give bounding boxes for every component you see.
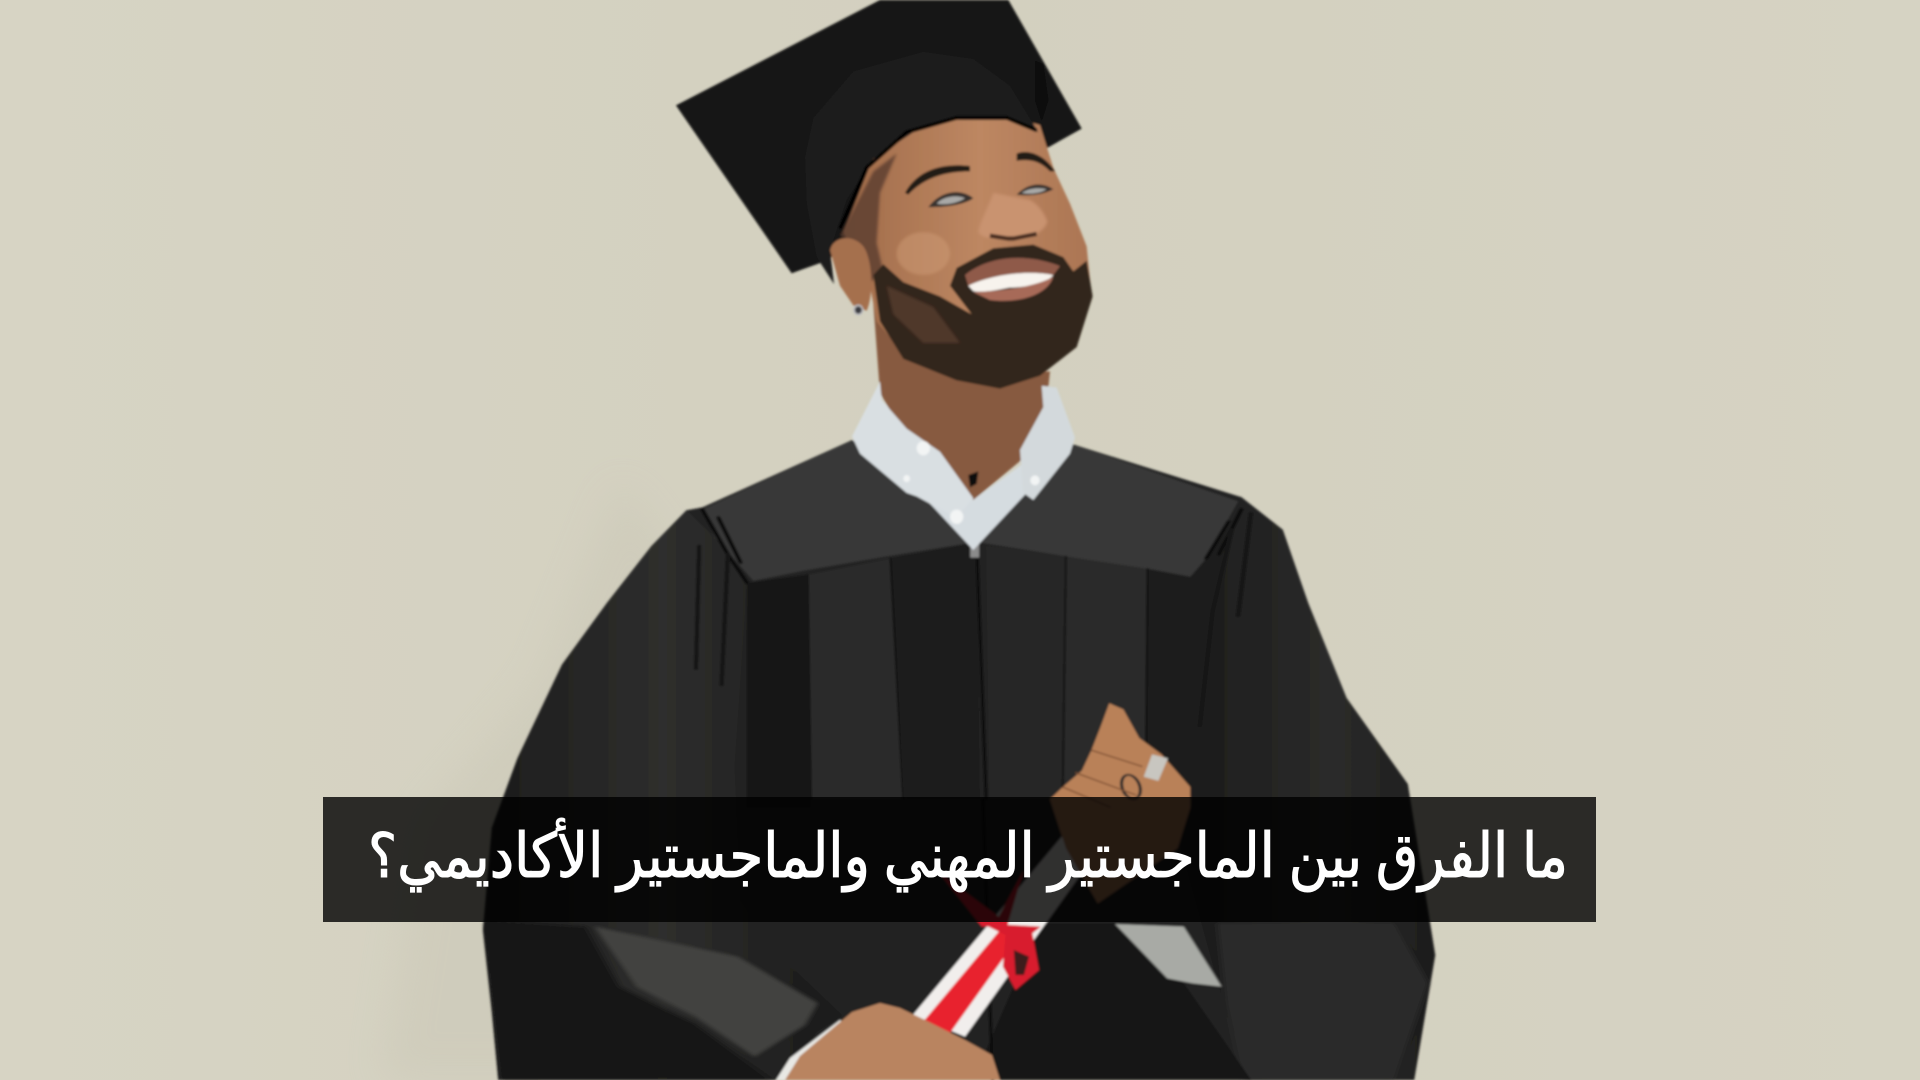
inner dark fold (973, 923, 1251, 1080)
cap band highlight (840, 118, 1037, 229)
nose (978, 193, 1047, 240)
fingers and thumb (1050, 703, 1190, 903)
beard (873, 245, 1093, 389)
bow opening (1014, 950, 1029, 975)
red bow (940, 870, 1041, 990)
ear (830, 238, 871, 311)
left sleeve drape (595, 927, 818, 1057)
beard highlights (887, 286, 960, 343)
collar right (1020, 386, 1075, 500)
teeth (968, 273, 1053, 292)
finger creases (1063, 750, 1142, 807)
title text: ما الفرق بين الماجستير المهني والماجستير الأكاديمي؟ (368, 818, 1568, 893)
left cuff (776, 1020, 850, 1080)
right eye (1017, 184, 1053, 195)
finger tattoo (1119, 774, 1143, 800)
upper lip (965, 258, 1060, 286)
collar left (852, 381, 973, 518)
left sleeve shadow (485, 922, 771, 1080)
necklace pendant (968, 471, 978, 487)
shirt collar (852, 381, 1075, 550)
lower gown drapes (485, 922, 1428, 1080)
zipper pull (970, 541, 979, 558)
eyebrows (905, 165, 970, 195)
left sleeve (483, 510, 843, 1080)
soft wall shadow (380, 480, 680, 1080)
mouth (965, 258, 1060, 301)
tassel knot (1035, 61, 1048, 121)
head and shoulders (676, 0, 1093, 550)
earring (854, 305, 863, 315)
scroll tube (913, 827, 1110, 1037)
lower lip (973, 277, 1053, 301)
pleat shading (747, 575, 811, 807)
diploma (913, 827, 1110, 1037)
pleats (696, 509, 1251, 1080)
ring (1144, 754, 1168, 781)
front panels (747, 542, 1193, 1080)
hair fade (840, 154, 897, 282)
title band (323, 797, 1596, 922)
left eye (928, 192, 973, 207)
gown (483, 440, 1435, 1080)
cap board (676, 0, 1082, 273)
red stripe on scroll (925, 927, 1024, 1033)
neck (873, 304, 1050, 500)
right sleeve (1181, 497, 1435, 1080)
cap crown (805, 52, 1038, 284)
left hand (785, 1003, 1000, 1080)
right sleeve fold (1218, 923, 1428, 1080)
shirt cuff glimpse (1115, 924, 1222, 987)
collar buttons (903, 441, 1040, 524)
yoke (702, 440, 1238, 581)
nostrils (990, 234, 1037, 239)
gown silhouette (483, 440, 1435, 1080)
cheek highlight (897, 232, 950, 275)
right hand fist (1050, 703, 1190, 903)
shirt placket (913, 443, 1027, 550)
face (843, 107, 1092, 387)
graduate figure (483, 0, 1435, 1080)
